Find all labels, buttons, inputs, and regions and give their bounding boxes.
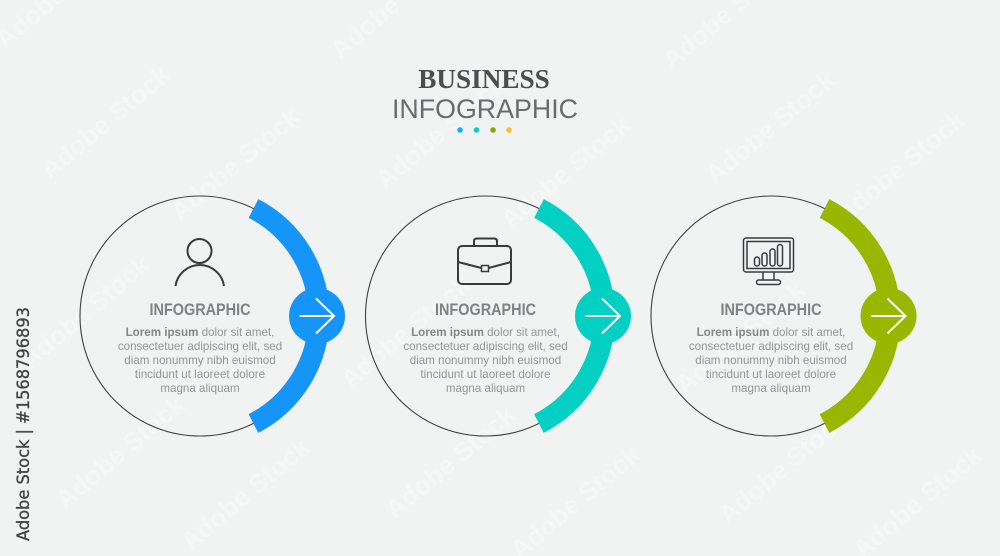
title: INFOGRAPHIC: [392, 94, 578, 124]
outline circle: [366, 196, 606, 436]
text block: tincidunt ut laoreet dolore: [706, 368, 836, 381]
curved band: [254, 208, 319, 424]
arrow button: [860, 288, 916, 344]
arrow button: [575, 288, 631, 344]
text block: magna aliquam: [160, 382, 240, 395]
text block: Lorem ipsum dolor sit amet,: [126, 326, 274, 339]
curved band: [539, 208, 604, 424]
text block: tincidunt ut laoreet dolore: [135, 368, 265, 381]
text block: Lorem ipsum dolor sit amet,: [697, 326, 845, 339]
outline circle: [651, 196, 891, 436]
arrow: [586, 298, 620, 334]
text: Adobe Stock: [15, 249, 156, 375]
heading: INFOGRAPHIC: [150, 300, 250, 319]
text: Adobe Stock: [35, 59, 176, 185]
text: Adobe Stock: [50, 389, 191, 515]
text block: consectetuer adipiscing elit, sed: [118, 340, 282, 353]
text block: diam nonummy nibh euismod: [695, 354, 847, 367]
outline circle: [80, 196, 320, 436]
text: Adobe Stock: [495, 109, 636, 235]
stock id label: Adobe Stock | #1568796893: [14, 307, 33, 541]
text: Adobe Stock: [830, 104, 971, 230]
curved band: [824, 208, 890, 424]
heading: INFOGRAPHIC: [720, 300, 822, 319]
icon: briefcase: [458, 238, 511, 284]
text block: consectetuer adipiscing elit, sed: [403, 340, 568, 353]
text: Adobe Stock: [335, 269, 476, 395]
icon: monitor chart: [744, 238, 794, 284]
text block: consectetuer adipiscing elit, sed: [689, 340, 853, 353]
text block: diam nonummy nibh euismod: [410, 354, 561, 367]
title: [392, 64, 578, 124]
panel: step 2: [366, 196, 631, 436]
text block: magna aliquam: [731, 382, 811, 395]
arrow: [871, 298, 906, 334]
text block: tincidunt ut laoreet dolore: [420, 368, 551, 381]
arrow: [300, 298, 334, 334]
text: Adobe Stock: [700, 64, 841, 190]
text: Adobe Stock: [175, 431, 316, 556]
text: Adobe Stock: [670, 274, 811, 400]
text block: diam nonummy nibh euismod: [124, 354, 276, 367]
heading: INFOGRAPHIC: [435, 300, 536, 319]
title dots: [457, 127, 512, 133]
text: Adobe Stock: [165, 101, 306, 227]
text: Adobe Stock: [713, 404, 854, 530]
icon: person: [176, 239, 224, 286]
arrow button: [289, 288, 345, 344]
text: Adobe Stock: [380, 399, 521, 525]
panel: step 1: [80, 196, 345, 436]
panel: step 3: [651, 196, 916, 436]
text: Adobe Stock: [370, 69, 511, 195]
text block: Lorem ipsum dolor sit amet,: [411, 326, 560, 339]
text block: magna aliquam: [446, 382, 525, 395]
title: BUSINESS: [418, 64, 550, 94]
